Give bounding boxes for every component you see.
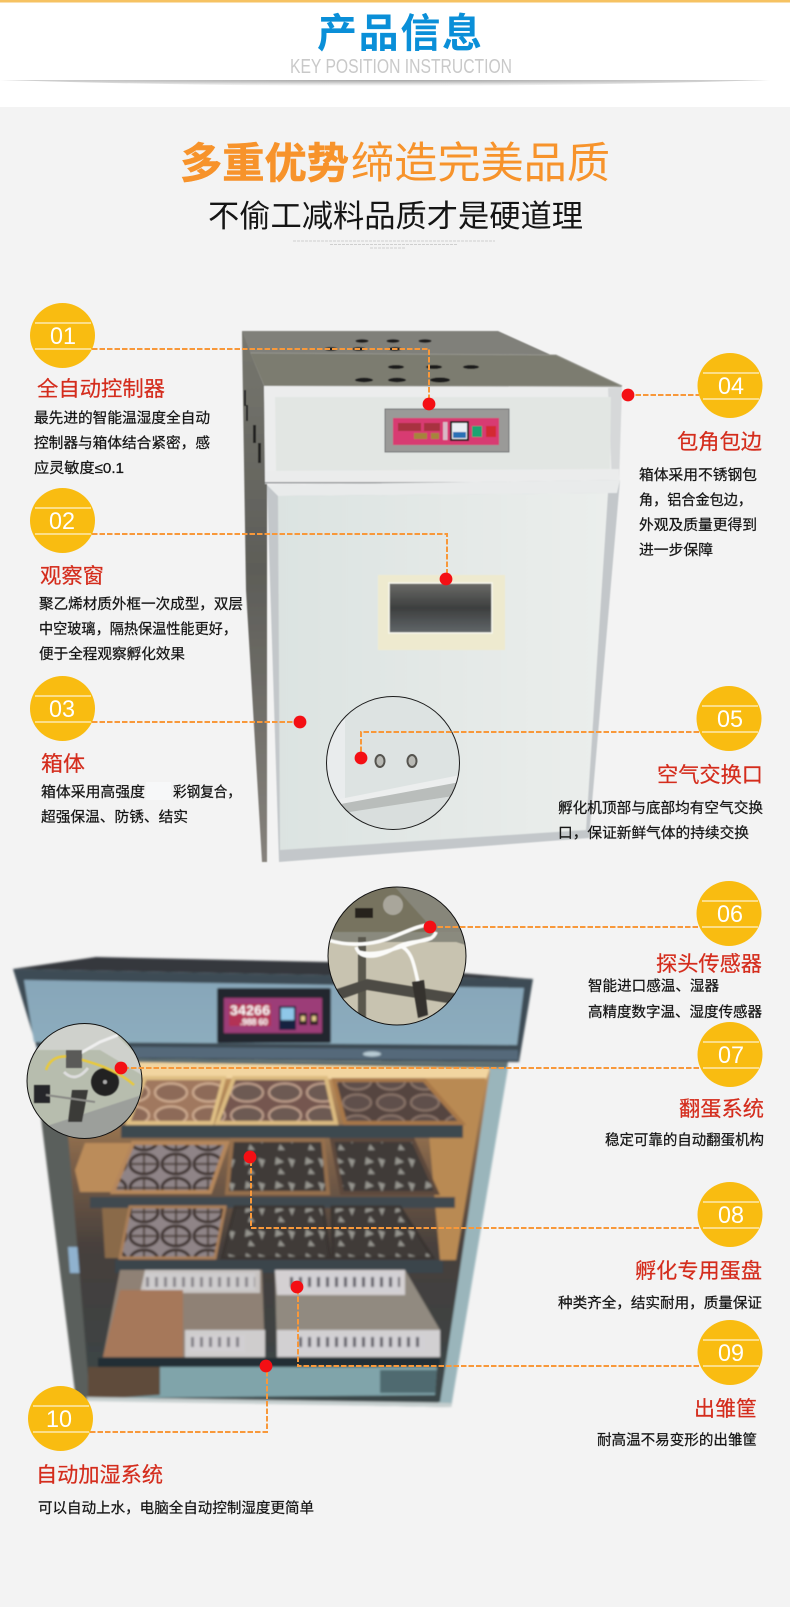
lower shelf [98,1358,440,1367]
badge 04: 04 [718,373,744,400]
badge 01 [30,303,95,368]
badge 10: 10 [46,1406,72,1433]
text 06: 高精度数字温、湿度传感器 [588,1004,762,1021]
cabinet digital panel: .988 60 [240,1017,268,1027]
cabinet digital panel: 34266 [230,1002,270,1018]
shelf bar [121,1125,463,1138]
upper front panel [264,386,622,483]
callout 06 [424,881,762,1021]
badge 03 [30,676,95,741]
text 02 [39,596,243,663]
callout 04 [622,353,762,559]
heading 10: 自动加湿系统 [36,1464,163,1487]
text 04: 进一步保障 [639,541,713,559]
badge 02 [30,488,95,553]
marker 10 [260,1360,272,1372]
leader line 04 [628,394,699,396]
text 05 [558,799,764,842]
heading 09: 出雏筐 [694,1398,757,1421]
leader line 01 [92,349,429,404]
door [267,480,620,862]
badge 09: 09 [718,1340,744,1367]
text 08: 种类齐全，结实耐用，质量保证 [558,1294,762,1312]
heading 05: 空气交换口 [657,764,763,787]
main heading [180,140,610,188]
sub heading: 不偷工减料品质才是硬道理 [208,199,583,234]
leader line 02 [92,534,447,579]
text 03: 超强保温、防锈、结实 [41,809,188,826]
callout 03 [30,676,306,826]
text 04: 角，铝合金包边， [639,492,752,509]
text 05: 孵化机顶部与底部均有空气交换 [558,799,764,817]
tiny decorative caption [293,241,495,248]
main heading: 缔造完美品质 [351,140,610,188]
inset: turning motor [27,1024,142,1139]
text 04: 箱体采用不锈钢包 [639,467,757,484]
leader line 09 [298,1287,699,1366]
marker 08 [244,1151,256,1163]
badge 02: 02 [49,508,75,535]
badge 07 [698,1022,762,1087]
badge 10 [28,1386,93,1451]
text 06 [588,978,762,1021]
badge 08: 08 [718,1202,744,1229]
badge 08 [698,1182,762,1247]
text 02: 中空玻璃，隔热保温性能更好， [39,621,237,638]
text 06: 智能进口感温、湿器 [588,978,720,995]
heading 06: 探头传感器 [656,953,762,976]
marker 01 [423,398,435,410]
badge 04 [698,353,762,418]
cabinet digital panel [217,988,331,1043]
text 01: 控制器与箱体结合紧密，感 [34,435,210,452]
text 09: 耐高温不易变形的出雏筐 [597,1432,757,1449]
leader line 06 [430,926,699,928]
wood side walls [424,1078,486,1260]
text 02: 聚乙烯材质外框一次成型，双层 [39,596,243,613]
callout 10 [28,1360,314,1517]
heading 04: 包角包边 [677,431,762,454]
text 03: 箱体采用高强度 [41,784,145,801]
badge 07: 07 [718,1042,744,1069]
badge 05: 05 [717,706,743,733]
body side frames [38,1058,508,1407]
callout 05 [355,686,764,842]
header band [0,0,790,107]
callout 01 [30,303,435,477]
marker 02 [440,573,452,585]
shelf bar [115,1260,443,1273]
leader line 07 [121,1067,699,1069]
badge 06 [696,881,762,946]
top surface [242,331,622,387]
text 01: 最先进的智能温湿度全自动 [34,409,210,427]
heading 01: 全自动控制器 [37,378,165,401]
trays shelf 3 [120,1207,433,1258]
cabinet roof [13,957,533,979]
side panel [242,331,267,862]
text 07: 稳定可靠的自动翻蛋机构 [605,1132,764,1149]
badge 01: 01 [50,323,76,350]
leader line 10 [90,1366,267,1432]
shelf bar [90,1197,455,1208]
callout 02 [30,488,452,663]
callout 07 [115,1022,764,1149]
inset: air vent [326,696,460,830]
marker 03 [294,716,306,728]
callout 08 [244,1151,763,1312]
observation window [378,575,505,650]
main heading: 多重优势 [180,140,349,187]
subtitle english: KEY POSITION INSTRUCTION [290,56,512,78]
text 04 [639,467,757,559]
marker 04 [622,389,634,401]
badge 09 [698,1320,762,1385]
text 02: 便于全程观察孵化效果 [39,645,185,663]
control panel [385,409,509,452]
text 03 [41,782,241,826]
text 01 [34,409,210,477]
trays shelf 2 [113,1140,437,1193]
heading 03: 箱体 [41,753,85,776]
cabinet header [13,969,533,1062]
photo: incubator exterior [242,331,622,862]
trays shelf 1 [128,1078,462,1123]
interior [62,1062,490,1402]
heading 02: 观察窗 [40,565,104,588]
heading 08: 孵化专用蛋盘 [635,1260,762,1283]
text 10: 可以自动上水，电脑全自动控制湿度更简单 [38,1499,314,1517]
badge 05 [696,686,762,751]
callout 09 [291,1281,762,1449]
badge 03: 03 [49,696,75,723]
text 03: 彩钢复合， [173,783,241,801]
marker 09 [291,1281,303,1293]
photo: incubator interior [13,957,533,1407]
text 05: 口，保证新鲜气体的持续交换 [558,824,750,842]
marker 06 [424,921,436,933]
leader line 08 [251,1157,699,1228]
inset: sensor probe [328,887,466,1027]
text 04: 外观及质量更得到 [639,517,757,534]
leader line 03 [92,721,300,723]
marker 07 [115,1062,127,1074]
text 01: 应灵敏度≤0.1 [34,459,124,477]
leader line 05 [361,732,699,758]
marker 05 [355,752,367,764]
baskets [103,1270,440,1357]
heading 07: 翻蛋系统 [679,1098,764,1121]
badge 06: 06 [717,901,743,928]
title: 产品信息 [317,12,482,56]
